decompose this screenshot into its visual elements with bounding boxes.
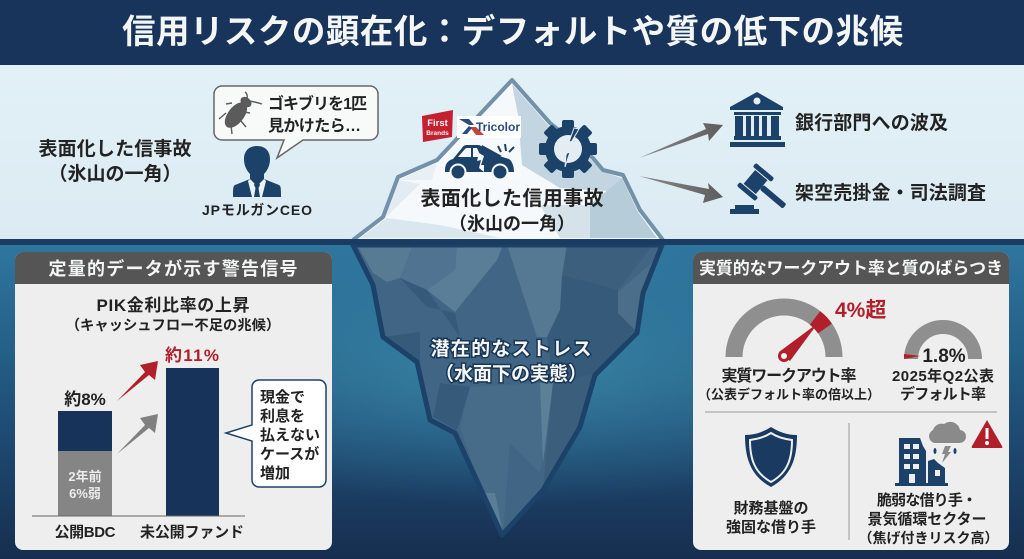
gauge: real workout rate: （公表デフォルト率の倍以上） [698, 387, 880, 402]
panel: quantitative data [15, 252, 332, 550]
panel heading [15, 252, 332, 284]
label: bank contagion: 銀行部門への波及 [795, 112, 948, 134]
callout: cash shortage: 利息を [260, 407, 305, 425]
bar chart: 2年前 [68, 469, 102, 484]
callout: cash shortage [226, 380, 326, 487]
label: iceberg tip: （氷山の一角） [449, 214, 575, 234]
label: surfaced incidents left [38, 138, 192, 185]
chart title: PIK金利比率の上昇 [96, 295, 250, 315]
gauge: published default rate: 1.8% [922, 346, 966, 367]
background: sea [0, 235, 1024, 559]
label: iceberg tip: 表面化した信用事故 [420, 187, 604, 210]
gauge: real workout rate: 実質ワークアウト率 [722, 367, 856, 385]
label: fictitious receivables: 架空売掛金・司法調査 [795, 182, 986, 204]
bar chart: 公開BDC [54, 524, 116, 541]
icon: storm cloud [929, 422, 966, 463]
callout: cash shortage: ケースが [260, 445, 319, 463]
speech bubble [214, 86, 378, 158]
label: vulnerable borrower [858, 491, 998, 546]
panel: workout rate and quality [693, 252, 1009, 550]
speech bubble: ゴキブリを1匹 [268, 94, 367, 113]
label: strong borrower: 強固な借り手 [726, 519, 816, 536]
speech bubble: 見かけたら… [268, 117, 361, 135]
callout: cash shortage: 増加 [260, 464, 290, 482]
chart title: （キャッシュフロー不足の兆候） [66, 317, 280, 334]
bar chart: 未公開ファンド [140, 523, 244, 541]
logo: First Brands: First [427, 118, 449, 129]
label: iceberg tip [420, 187, 604, 234]
logo: First Brands [422, 110, 453, 142]
bar chart: 約8% [64, 390, 106, 409]
waterline [0, 239, 1024, 245]
arrow: red rise [117, 361, 158, 401]
panel heading: 定量的データが示す警告信号 [48, 258, 298, 279]
icon: bank [730, 92, 785, 147]
label: surfaced incidents left: （氷山の一角） [48, 163, 182, 185]
icon: warning triangle [972, 420, 1002, 448]
bar chart: 6%弱 [69, 486, 101, 501]
label: strong borrower: 財務基盤の [734, 499, 808, 517]
icon: broken gear [539, 120, 597, 178]
logo: First Brands: Brands [426, 130, 449, 137]
icon: gavel [730, 163, 794, 218]
iceberg above water [353, 80, 663, 240]
title banner: 信用リスクの顕在化：デフォルトや質の低下の兆候 [122, 13, 904, 51]
gauge: published default rate [892, 327, 994, 403]
callout: cash shortage: 現金で [260, 388, 305, 406]
label: JP Morgan CEO: JPモルガンCEO [202, 202, 312, 218]
label: strong borrower [726, 499, 816, 536]
label: vulnerable borrower: （焦げ付きリスク高） [858, 530, 998, 546]
label: vulnerable borrower: 脆弱な借り手・ [877, 491, 977, 509]
gauge: real workout rate [698, 299, 886, 402]
gauge: published default rate: 2025年Q2公表 [892, 367, 994, 385]
arrow: grey rise [117, 414, 158, 454]
iceberg below water [353, 245, 662, 535]
icon: shield [745, 427, 797, 487]
gauge: published default rate: デフォルト率 [900, 385, 986, 403]
label: latent stress: 潜在的なストレス [430, 338, 592, 360]
label: latent stress: （水面下の実態） [435, 362, 587, 385]
label: vulnerable borrower: 景気循環セクター [868, 510, 986, 528]
logo: Tricolor [457, 116, 521, 138]
icon: crashed car [440, 140, 522, 180]
bar chart: 約11% [165, 346, 219, 365]
panel heading [693, 252, 1009, 284]
callout: cash shortage: 払えない [260, 426, 320, 444]
title banner [0, 0, 1024, 65]
arrow: to gavel [639, 176, 723, 203]
icon: JP Morgan CEO silhouette [233, 146, 281, 197]
icon: damaged building [895, 438, 948, 486]
label: latent stress [430, 338, 592, 385]
bar chart [32, 346, 245, 541]
gauge: real workout rate: 4%超 [835, 299, 886, 322]
panel heading: 実質的なワークアウト率と質のばらつき [699, 259, 1003, 278]
chart title [66, 295, 280, 334]
arrow: to banking [639, 123, 723, 158]
icon: cockroach [219, 92, 262, 134]
background: sky [0, 65, 1024, 240]
label: surfaced incidents left: 表面化した信事故 [38, 138, 192, 160]
logo: Tricolor: Tricolor [476, 120, 520, 134]
